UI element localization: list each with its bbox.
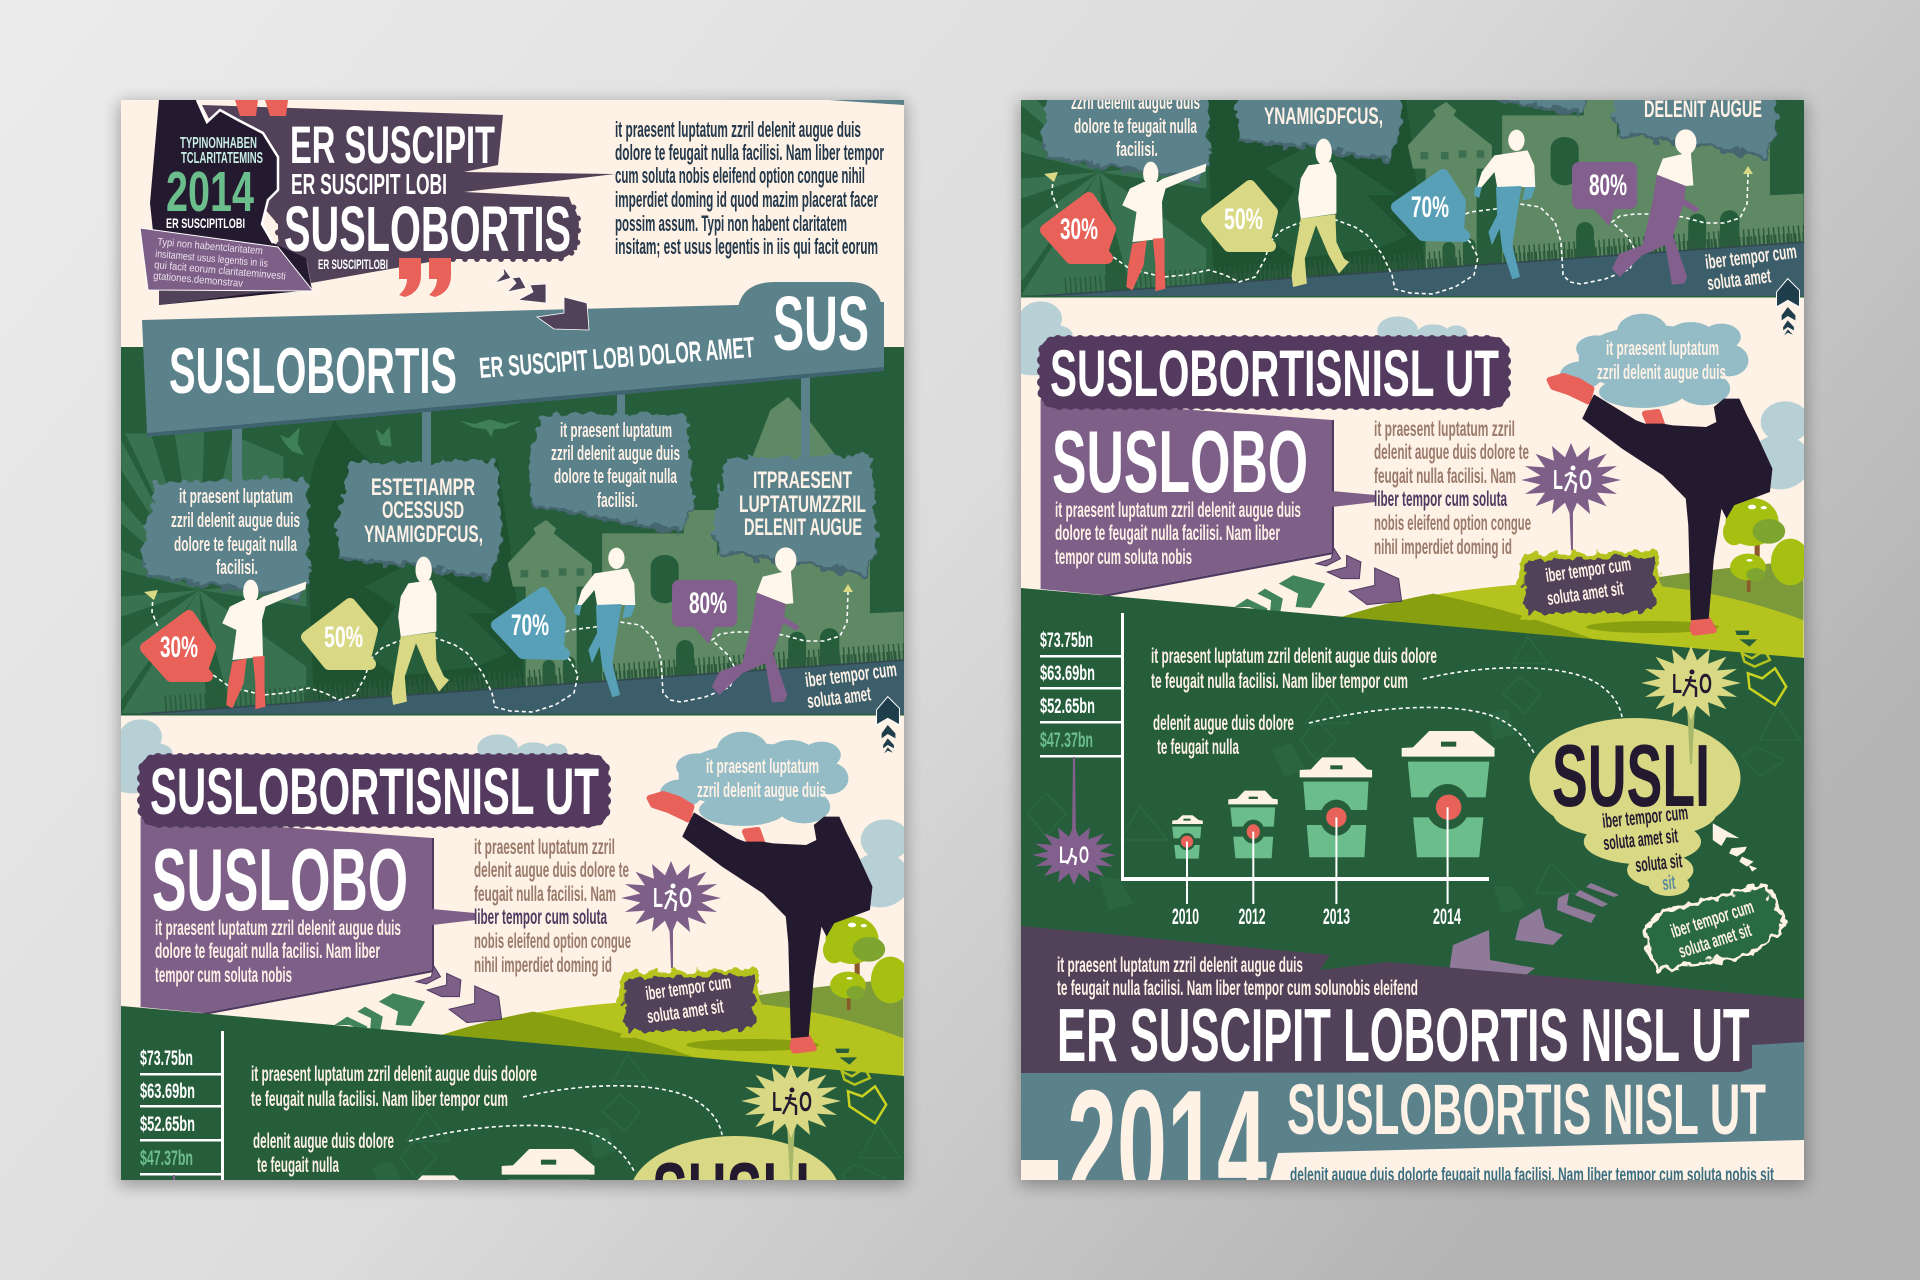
panel: header block: [140, 100, 884, 330]
torn outlined caption: [1646, 885, 1786, 971]
chart: year labels: 2010: [1172, 904, 1199, 929]
percentage tile: 30%: [146, 616, 210, 676]
needle callout: purple star: L: [1059, 842, 1068, 869]
panel: plum footer band: te feugait nulla facilisi. Nam liber tempor cum solunobis eleifend: [1057, 977, 1418, 1000]
paragraph: [474, 836, 631, 977]
paragraph: feugait nulla facilisi. Nam: [474, 883, 616, 906]
road caption: soluta amet: [806, 683, 872, 713]
panel: right poster: [997, 0, 1811, 1234]
icon: green arrows: [334, 993, 425, 1032]
year block: ER SUSCIPITLOBI: [166, 215, 245, 231]
panel: SUSLI bubble lower lobes: SUSLI: [1552, 726, 1710, 825]
purple box: dolore te feugait nulla facilisi. Nam liber: [155, 940, 380, 963]
dashed connectors: [1309, 668, 1622, 755]
icon: head silhouette: [150, 100, 312, 305]
needle callout star: L: [653, 882, 663, 913]
purple note: Typi non habentclaritatem: [157, 236, 264, 257]
sign posts: [232, 378, 810, 483]
panel: plum footer band: [1021, 926, 1804, 1077]
purple needle: [1072, 757, 1076, 840]
road: [141, 660, 904, 714]
panel: plum footer band: it praesent luptatum zzril delenit augue duis: [1057, 954, 1303, 977]
chart: year labels: 2013: [1323, 904, 1350, 929]
icon: birds: [280, 419, 522, 455]
paragraph: nihil imperdiet doming id: [474, 954, 612, 977]
panel: left poster: [121, 100, 904, 1180]
icon: clouds: [97, 719, 911, 907]
panel: torn sign 1: facilisi.: [216, 557, 258, 579]
icon: trees: [823, 916, 910, 1010]
paragraph: it praesent luptatum zzril: [474, 836, 615, 859]
panel: kick section: [97, 697, 911, 1080]
paragraph: intro: possim assum. Typi non habent claritatem: [615, 211, 847, 236]
panel: SUSLI bubble lower lobes: sit: [1661, 872, 1677, 895]
year block: [166, 135, 263, 231]
teal banner: SUS: [773, 281, 869, 367]
icon: lilac arrows: [1446, 883, 1619, 992]
icon: small chevrons: [882, 725, 895, 753]
panel: green chart section repeat on left poster: [121, 1006, 904, 1180]
chart notes: [1151, 645, 1437, 759]
paragraph: nobis eleifend option congue: [474, 930, 631, 953]
chart: year labels: [1172, 904, 1461, 929]
purple note: qui facit eorum claritateminvesti: [154, 259, 286, 282]
paragraph: intro: cum soluta nobis eleifend option congue nihil: [615, 163, 865, 188]
panel: SUSLI bubble lower lobes: soluta sit: [1634, 850, 1683, 877]
chart notes: it praesent luptatum zzril delenit augue duis dolore: [1151, 645, 1437, 668]
percentage tile: 50%: 50%: [324, 621, 363, 654]
panel: torn sign 4: DELENIT AUGUE: [744, 514, 862, 541]
year block: TYPINONHABEN: [180, 135, 257, 152]
panel: torn sign 3: [528, 413, 694, 534]
chart notes: te feugait nulla facilisi. Nam liber tempor cum: [1151, 670, 1408, 693]
cloud caption: [697, 756, 826, 802]
chart notes: delenit augue duis dolore: [1153, 712, 1294, 735]
panel: SUSLI bubble top: [1530, 718, 1740, 838]
icon: lime chevrons: [1735, 631, 1786, 705]
panel: green chart section upper part: [1021, 588, 1804, 860]
panel: green chart section lower part: [1021, 726, 1804, 1234]
percentage tile: 80%: [672, 580, 737, 644]
chart: lower axes and cup stems: [1121, 860, 1489, 904]
needle callout: purple star: O: [1079, 842, 1089, 869]
purple box: [141, 817, 475, 1015]
paragraph: delenit augue duis dolore te: [474, 859, 629, 882]
torn outlined caption: iber tempor cum: [1668, 897, 1756, 943]
panel: torn sign 2: ESTETIAMPR: [371, 474, 475, 501]
needle callout: purple star: [1032, 825, 1116, 885]
percentage tile: 70%: [497, 593, 564, 654]
panel: SUSLI bubble top: SUSLI: [1552, 726, 1710, 825]
chart: cups: [1168, 731, 1494, 860]
panel: torn sign 4: ITPRAESENT: [753, 467, 852, 494]
panel: SUSLI bubble lower lobes: iber tempor cum: [1601, 802, 1689, 833]
paragraph: intro: imperdiet doming id quod mazim placerat facer: [615, 187, 878, 212]
icon: white chevrons: [1713, 823, 1757, 872]
panel: torn sign 2: YNAMIGDFCUS,: [364, 521, 483, 548]
panel: teal footer band: [1021, 1042, 1804, 1234]
purple box: tempor cum soluta nobis: [155, 964, 292, 987]
chart: value labels: $63.69bn: [1040, 662, 1095, 685]
chart notes: te feugait nulla: [1157, 736, 1239, 759]
needle callout star: [621, 861, 721, 968]
panel: forest scene: [121, 347, 904, 716]
plum speech shape: [202, 105, 615, 283]
panel: torn sign 4: [712, 455, 878, 577]
panel: runners scene and kick section: [97, 347, 911, 1080]
icon: purple arrows: [416, 966, 502, 1023]
percentage tile: 70%: 70%: [511, 609, 549, 642]
needle callout: khaki star: L: [1672, 668, 1682, 699]
torn caption box: [620, 972, 758, 1034]
chart: year labels: 2014: [1433, 904, 1461, 929]
cup 2014: [1402, 731, 1494, 857]
panel: torn sign 3: dolore te feugait nulla: [554, 466, 678, 488]
icon: four runner silhouettes: [222, 547, 800, 709]
scene background: rays, trees, castle: [121, 347, 904, 713]
chart: value labels: [1040, 629, 1095, 752]
faint drink pattern lower: [1099, 863, 1581, 913]
headline text: ER SUSCIPIT LOBI: [291, 169, 447, 201]
panel: SUSLI bubble lower lobes: [1552, 726, 1716, 896]
poster shadows: [119, 102, 1806, 1186]
percentage tile: 30%: 30%: [160, 631, 198, 664]
teal banner: ER SUSCIPIT LOBI DOLOR AMET: [478, 332, 756, 385]
needle callout: khaki star: O: [1699, 668, 1712, 699]
teal banner: SUSLOBORTIS: [169, 334, 457, 407]
icon: kicker silhouette: [650, 794, 872, 1051]
torn caption box: iber tempor cum: [644, 972, 732, 1005]
icon: dark up arrow: [877, 697, 899, 725]
cup 2010: [1168, 815, 1206, 859]
headline text: ER SUSCIPITLOBI: [318, 256, 388, 272]
purple note: gtationes.demonstrav: [153, 270, 244, 290]
paragraph: intro: insitam; est usus legentis in iis qui facit eorum: [615, 234, 878, 259]
paragraph: intro: dolore te feugait nulla facilisi. Nam liber tempor: [615, 140, 884, 165]
icon: header arrows: [495, 267, 589, 330]
teal banner: [142, 281, 884, 437]
purple note: insitamest usus legentis in iis: [155, 248, 268, 270]
cloud caption: it praesent luptatum: [706, 756, 819, 778]
cup 2013: [1298, 757, 1375, 857]
panel: SUSLI bubble lower lobes: soluta amet sit: [1602, 825, 1679, 855]
purple box: it praesent luptatum zzril delenit augue duis: [155, 917, 401, 940]
panel: torn sign 4: LUPTATUMZZRIL: [739, 491, 866, 518]
panel: torn sign 1: zzril delenit augue duis: [171, 510, 300, 532]
needle callout: khaki star: [1641, 646, 1741, 764]
panel: torn sign 3: facilisi.: [597, 490, 638, 512]
percentage tile: 50%: [307, 604, 372, 664]
year block: TCLARITATEMINS: [181, 150, 263, 167]
paragraph: intro: [615, 117, 884, 259]
faint drink pattern: [1028, 637, 1800, 840]
icon: quote marks: [235, 100, 451, 297]
percentage tile: 80%: 80%: [689, 587, 727, 620]
paragraph: intro: it praesent luptatum zzril delenit augue duis: [615, 117, 861, 142]
chart: value labels: $47.37bn: [1040, 729, 1093, 752]
headline text: SUSLOBORTIS: [284, 193, 571, 265]
panel: torn sign 3: it praesent luptatum: [560, 420, 672, 442]
panel: torn sign 2: OCESSUSD: [382, 497, 464, 524]
panel: runners and kick section repeat: [997, 0, 1811, 662]
panel: torn sign 1: [141, 478, 310, 601]
torn outlined caption: soluta amet sit: [1676, 920, 1754, 963]
chart: value labels: $73.75bn: [1040, 629, 1093, 652]
road caption: iber tempor cum: [804, 659, 898, 692]
cup 2012: [1227, 791, 1278, 858]
headline text: ER SUSCIPIT: [290, 116, 495, 175]
year block: 2014: [166, 160, 254, 224]
panel: torn sign 2: [337, 460, 503, 581]
dashed route: [152, 592, 848, 712]
purple note: [140, 228, 313, 291]
panel: torn sign 1: dolore te feugait nulla: [174, 534, 298, 556]
title banner: [142, 754, 606, 828]
paragraph: liber tempor cum soluta: [474, 906, 607, 929]
purple box: SUSLOBO: [152, 830, 408, 929]
chart: value labels: $52.65bn: [1040, 695, 1095, 718]
chart: axis and value ticks: [1040, 613, 1124, 860]
panel: teal footer band: 2014: [1067, 1058, 1267, 1234]
headline text: [284, 116, 571, 272]
panel: torn sign 3: zzril delenit augue duis: [551, 443, 680, 465]
cloud caption: zzril delenit augue duis: [697, 780, 826, 802]
road caption: [804, 659, 898, 713]
panel: torn sign 1: it praesent luptatum: [179, 486, 293, 508]
title banner: SUSLOBORTISNISL UT: [150, 754, 599, 828]
torn caption box: soluta amet sit: [646, 996, 725, 1028]
chart: year labels: 2012: [1238, 904, 1266, 929]
needle callout star: O: [679, 882, 692, 913]
hills, kicker, trees, arrows: [334, 725, 910, 1080]
